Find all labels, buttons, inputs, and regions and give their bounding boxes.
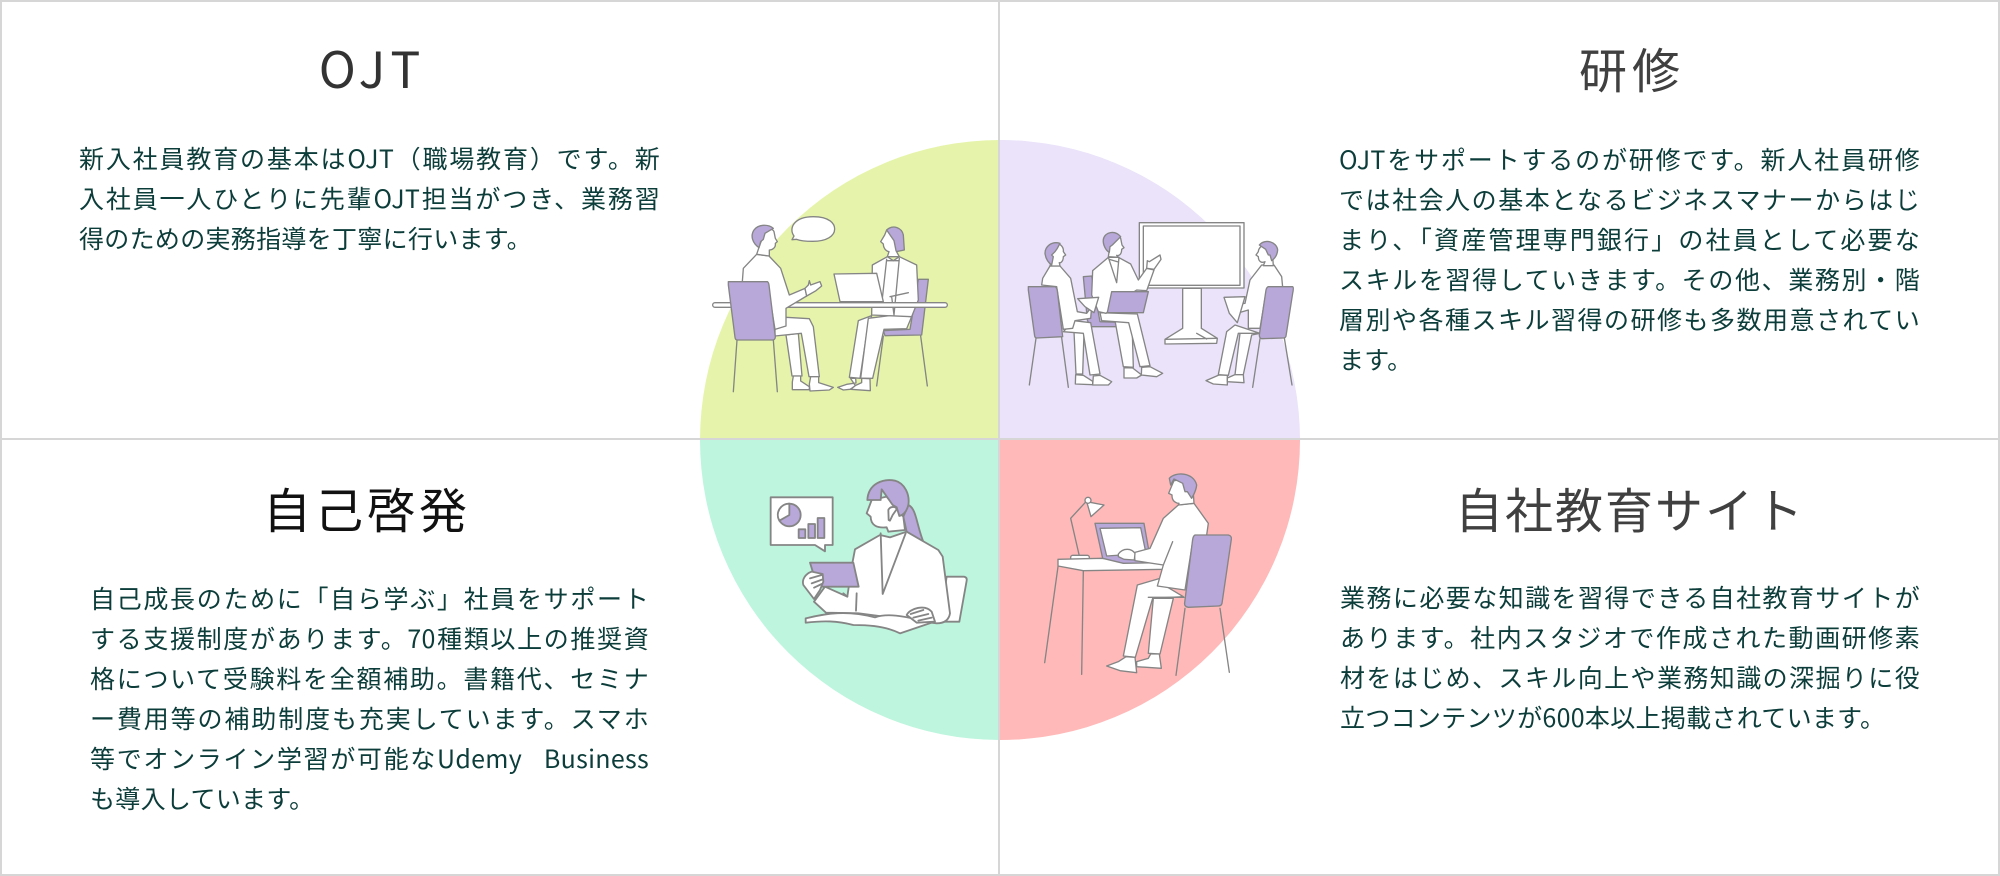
open book — [806, 613, 932, 633]
illustration: people attending a presentation — [1028, 223, 1293, 387]
text block: in-house site description: あります。社内スタジオで作成された動画研修素 — [1340, 619, 1920, 655]
woman's chair — [877, 279, 928, 386]
man's torso — [1118, 474, 1208, 590]
presenter's chair — [1083, 276, 1133, 327]
man's trousers — [775, 317, 833, 391]
table — [713, 303, 947, 307]
man's body — [742, 225, 822, 329]
quadrant: self development mint — [700, 440, 1000, 740]
chair back — [940, 577, 967, 622]
presenter — [1092, 233, 1163, 378]
text block: training description: まり、「資産管理専門銀行」の社員として必要な — [1339, 221, 1920, 257]
heading: 研修: 研修 — [1579, 32, 1685, 102]
text block: training description — [1339, 141, 1920, 377]
tablet — [810, 563, 859, 587]
illustration: woman studying with tablet — [771, 480, 967, 633]
right attendee — [1206, 241, 1293, 387]
text block: OJT description: 入社員一人ひとりに先輩OJT担当がつき、業務習 — [79, 180, 660, 216]
woman's body — [814, 532, 950, 623]
text block: self development description: も導入しています。 — [90, 780, 314, 816]
man's chair — [728, 282, 777, 392]
heading: OJT: OJT — [319, 31, 425, 103]
text block: OJT description: 得のための実務指導を丁寧に行います。 — [79, 220, 532, 256]
text block: in-house site description: 業務に必要な知識を習得できる自社教育サイトが — [1340, 579, 1920, 615]
laptop — [1095, 523, 1165, 563]
icon: chart speech bubble — [771, 497, 833, 551]
text block: training description: スキルを習得していきます。その他、業務別・階 — [1339, 261, 1920, 297]
laptop — [834, 273, 883, 302]
quadrant: OJT green — [700, 140, 1000, 440]
icon: speech bubble — [792, 217, 835, 241]
screen on stand — [1139, 223, 1244, 344]
illustration: man at a desk with laptop — [1045, 474, 1231, 675]
text block: self development description: 等でオンライン学習が可能なUdemy Business — [90, 740, 649, 776]
illustration: two people talking at a table — [713, 217, 947, 392]
text block: OJT description — [79, 140, 660, 256]
text block: self development description: する支援制度があります。70種類以上の推奨資 — [90, 620, 649, 656]
text block: OJT description: 新入社員教育の基本はOJT（職場教育）です。新 — [79, 140, 660, 176]
resting hand — [907, 608, 935, 623]
left attendee — [1028, 243, 1112, 387]
quadrant: training lavender — [1000, 140, 1300, 440]
ponytail — [903, 505, 924, 543]
text block: training description: では社会人の基本となるビジネスマナーからはじ — [1339, 181, 1920, 217]
hand on tablet — [803, 572, 823, 599]
heading: 自己啓発: 自己啓発 — [263, 472, 471, 542]
hair and face — [867, 480, 909, 532]
text block: self development description — [90, 580, 649, 816]
heading: 自社教育サイト: 自社教育サイト — [1455, 472, 1805, 542]
text block: self development description: 格について受験料を全額補助。書籍代、セミナ — [90, 660, 649, 696]
chair — [1148, 535, 1231, 675]
text block: self development description: ー費用等の補助制度も充実しています。スマホ — [90, 700, 649, 736]
woman — [838, 227, 918, 391]
desk lamp — [1071, 497, 1104, 560]
text block: training description: OJTをサポートするのが研修です。新人社員研修 — [1339, 141, 1920, 177]
quadrant: in-house site pink — [1000, 440, 1300, 740]
desk — [1045, 558, 1167, 674]
man's legs — [1107, 578, 1183, 673]
text block: training description: ます。 — [1339, 341, 1412, 377]
text block: in-house site description — [1340, 579, 1920, 735]
text block: self development description: 自己成長のために「自ら学ぶ」社員をサポート — [90, 580, 649, 616]
text block: training description: 層別や各種スキル習得の研修も多数用意されてい — [1339, 301, 1920, 337]
text block: in-house site description: 材をはじめ、スキル向上や業務知識の深掘りに役 — [1340, 659, 1920, 695]
text block: in-house site description: 立つコンテンツが600本以上掲載されています。 — [1340, 699, 1885, 735]
